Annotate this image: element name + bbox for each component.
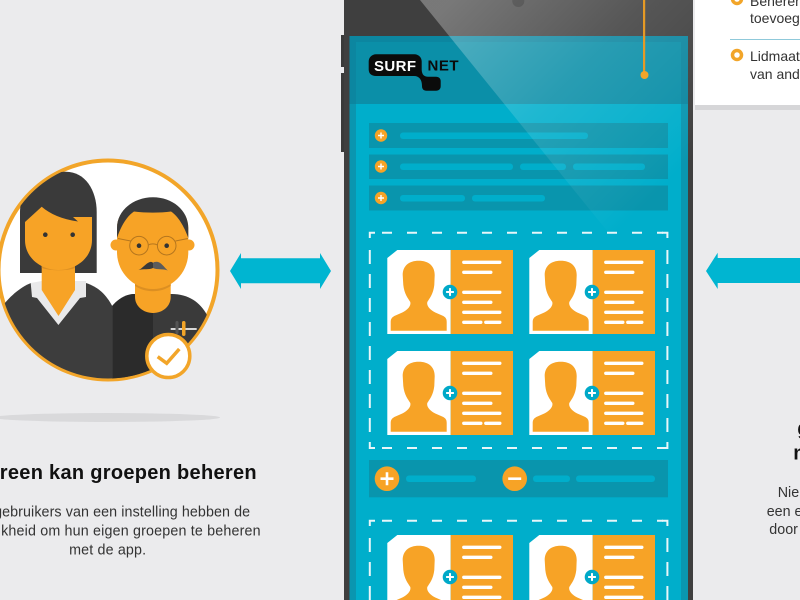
profile card 5 <box>387 535 513 600</box>
illustration: two users in circle <box>0 160 218 395</box>
callout line with dot <box>640 0 648 79</box>
logo: SURFnet: NET <box>428 58 458 74</box>
text block: left column <box>0 504 261 558</box>
list row 3 <box>369 186 668 210</box>
phone <box>344 0 693 600</box>
phone screen <box>350 36 688 600</box>
dashed selection group 2 <box>370 521 667 600</box>
logo: SURFnet: SURF <box>374 58 416 75</box>
illustration ground shadow <box>0 413 220 422</box>
panel: top right numbered list <box>695 0 800 110</box>
profile card 1 <box>387 250 513 334</box>
list row 2 <box>369 154 668 179</box>
profile card 3 <box>387 351 513 435</box>
heading: right column <box>793 418 800 464</box>
arrow: left double-headed <box>230 253 331 289</box>
phone glare <box>420 0 693 212</box>
profile card 2 <box>529 250 655 334</box>
phone body <box>344 0 693 600</box>
text block: left column: met de app. <box>69 542 146 558</box>
logo: SURFnet <box>369 54 458 91</box>
arrow: right double-headed <box>706 253 800 289</box>
phone camera <box>512 0 524 7</box>
add and remove bar <box>369 460 668 497</box>
profile card 4 <box>529 351 655 435</box>
list row 1 <box>369 123 668 148</box>
profile card 6 <box>529 535 655 600</box>
text block: right column <box>767 485 800 538</box>
dashed selection group 1 <box>370 233 667 448</box>
phone side buttons <box>341 35 344 152</box>
